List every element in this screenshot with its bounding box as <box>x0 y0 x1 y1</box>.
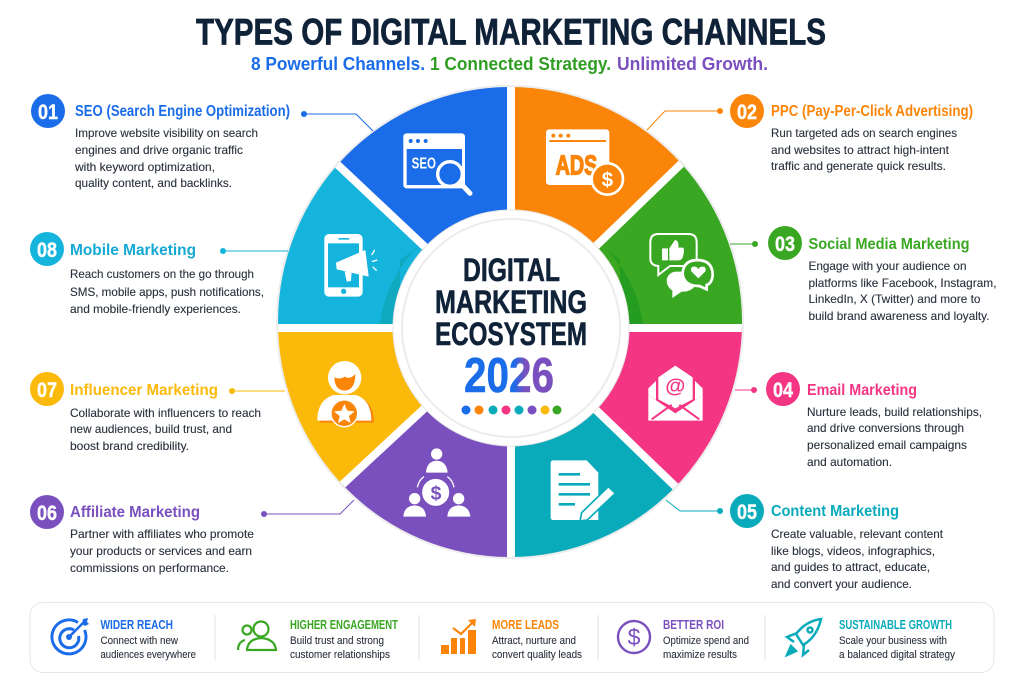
description: boost brand credibility. <box>70 440 189 453</box>
heading: Social Media Marketing <box>808 236 970 253</box>
description: Engage with your audience on <box>808 260 966 273</box>
hub heading: MARKETING <box>435 284 587 320</box>
number badge <box>766 372 800 406</box>
description: SMS, mobile apps, push notifications, <box>70 286 264 299</box>
segment: affiliate <box>342 412 508 557</box>
heading: Influencer Marketing <box>70 382 218 399</box>
channel 04: email <box>735 372 982 469</box>
icon: ads browser and dollar coin: $ <box>602 169 614 192</box>
subtitle <box>251 54 768 74</box>
description: commissions on performance. <box>70 562 229 575</box>
number badge <box>30 372 64 406</box>
segment: influencer <box>278 328 422 484</box>
description: your products or services and earn <box>70 545 252 558</box>
benefit: sustainable growth: SUSTAINABLE GROWTH <box>839 618 952 632</box>
benefit: more leads <box>441 618 582 661</box>
description: and automation. <box>807 456 892 469</box>
description: engines and drive organic traffic <box>75 144 243 157</box>
description: traffic and generate quick results. <box>771 160 946 173</box>
hub heading <box>435 252 587 352</box>
benefit: sustainable growth: Scale your business with <box>839 635 947 647</box>
icon: SEO browser and magnifier <box>403 133 470 193</box>
benefit: better ROI: Optimize spend and <box>663 635 749 647</box>
icon: affiliate network and dollar <box>403 448 470 517</box>
benefit: wider reach <box>52 618 196 661</box>
description: personalized email campaigns <box>807 439 967 452</box>
benefit: more leads: MORE LEADS <box>492 618 559 632</box>
icon: ads browser and dollar coin: ADS <box>556 149 597 180</box>
segment: social media <box>599 164 742 328</box>
description: like blogs, videos, infographics, <box>771 545 935 558</box>
description: and websites to attract high-intent <box>771 144 950 157</box>
description: and guides to attract, educate, <box>771 561 930 574</box>
benefit: more leads: convert quality leads <box>492 649 582 661</box>
channel 08: mobile <box>30 232 288 316</box>
number badge <box>768 226 802 260</box>
benefit: wider reach: audiences everywhere <box>100 649 196 661</box>
connector <box>301 111 373 131</box>
icon: growth bars <box>441 619 476 654</box>
icon: mobile phone with megaphone <box>324 234 377 297</box>
connector <box>229 388 285 394</box>
icon: email envelope: @ <box>665 374 685 397</box>
subtitle: 8 Powerful Channels. <box>251 54 425 74</box>
description: with keyword optimization, <box>74 161 215 174</box>
description <box>771 127 957 173</box>
wheel diagram <box>276 85 744 559</box>
title: TYPES OF DIGITAL MARKETING CHANNELS <box>196 10 826 52</box>
benefit: better ROI: BETTER ROI <box>663 618 724 632</box>
description <box>808 260 996 323</box>
description <box>70 528 254 575</box>
benefit: sustainable growth <box>787 618 955 661</box>
description: and mobile-friendly experiences. <box>70 303 241 316</box>
benefit: more leads: Attract, nurture and <box>492 635 576 647</box>
benefit: higher engagement <box>238 618 398 661</box>
benefit: higher engagement: Build trust and strong <box>290 635 384 647</box>
description: Nurture leads, build relationships, <box>807 406 982 419</box>
benefit: better ROI: maximize results <box>663 649 737 661</box>
description: Reach customers on the go through <box>70 268 254 281</box>
number badge: 06 <box>37 502 57 525</box>
description <box>807 406 982 469</box>
number badge <box>730 94 764 128</box>
benefit: higher engagement: HIGHER ENGAGEMENT <box>290 618 398 632</box>
number badge: 04 <box>773 379 793 402</box>
subtitle: Unlimited Growth. <box>617 54 768 74</box>
channel 07: influencer <box>30 372 285 453</box>
subtitle: 1 Connected Strategy. <box>430 54 611 74</box>
description <box>70 407 261 453</box>
channel 06: affiliate <box>30 495 354 575</box>
benefit: higher engagement: customer relationships <box>290 649 390 661</box>
connector <box>730 241 758 247</box>
hub heading: ECOSYSTEM <box>435 316 587 352</box>
icon: affiliate network and dollar: $ <box>431 484 442 505</box>
heading: Content Marketing <box>771 503 899 520</box>
icon: email envelope <box>648 366 703 421</box>
segment: PPC <box>511 87 682 243</box>
segment: email <box>599 328 742 486</box>
description: Partner with affiliates who promote <box>70 528 254 541</box>
connector <box>666 500 723 514</box>
number badge: 07 <box>37 379 57 402</box>
benefit: sustainable growth: a balanced digital strategy <box>839 649 955 661</box>
channel 05: content <box>666 494 944 591</box>
connector <box>261 500 354 517</box>
icon: rocket <box>787 619 821 655</box>
benefit: wider reach: Connect with new <box>100 635 178 647</box>
number badge: 05 <box>737 501 757 524</box>
connector <box>220 248 288 254</box>
description: quality content, and backlinks. <box>75 177 232 190</box>
segment: mobile <box>278 164 422 328</box>
description: and convert your audience. <box>771 578 912 591</box>
hub heading: DIGITAL <box>463 252 560 288</box>
segment: SEO <box>338 87 508 244</box>
number badge <box>730 494 764 528</box>
icon: target <box>52 618 89 654</box>
description <box>70 268 264 316</box>
number badge: 02 <box>737 101 757 124</box>
description: new audiences, build trust, and <box>70 423 232 436</box>
heading: Mobile Marketing <box>70 242 196 259</box>
number badge: 08 <box>37 239 57 262</box>
description <box>771 528 944 591</box>
benefit: wider reach: WIDER REACH <box>100 618 173 632</box>
number badge <box>31 94 65 128</box>
description: build brand awareness and loyalty. <box>808 310 990 323</box>
icon: ads browser and dollar coin <box>546 129 623 195</box>
heading: Email Marketing <box>807 382 917 399</box>
number badge <box>30 232 64 266</box>
center hub <box>393 210 629 446</box>
number badge: 03 <box>775 233 795 256</box>
icon: SEO browser and magnifier: SEO <box>412 155 436 172</box>
number badge <box>30 495 64 529</box>
heading: SEO (Search Engine Optimization) <box>75 103 290 120</box>
heading: Affiliate Marketing <box>70 504 200 521</box>
description <box>74 127 258 190</box>
description: and drive conversions through <box>807 422 964 435</box>
description: Create valuable, relevant content <box>771 528 944 541</box>
channel 03: social media <box>730 226 996 323</box>
benefit: better ROI <box>618 618 749 661</box>
segment: content <box>511 413 676 557</box>
icon: content document and pencil <box>551 460 615 521</box>
icon: dollar circle: $ <box>628 624 641 650</box>
heading: PPC (Pay-Per-Click Advertising) <box>771 103 973 120</box>
icon: influencer person with star <box>317 361 374 427</box>
channel 01: SEO <box>31 94 373 190</box>
icon: social chat bubbles <box>650 234 713 298</box>
description: Run targeted ads on search engines <box>771 127 957 140</box>
hub colour dots <box>462 406 562 414</box>
description: Collaborate with influencers to reach <box>70 407 261 420</box>
description: LinkedIn, X (Twitter) and more to <box>808 293 980 306</box>
description: platforms like Facebook, Instagram, <box>808 277 996 290</box>
connector <box>647 108 723 130</box>
connector <box>735 387 757 393</box>
icon: people <box>238 622 276 650</box>
hub year: 2026 <box>464 349 554 403</box>
description: Improve website visibility on search <box>75 127 258 140</box>
benefits panel <box>30 602 994 672</box>
number badge: 01 <box>38 101 58 124</box>
channel 02: PPC <box>647 94 973 173</box>
